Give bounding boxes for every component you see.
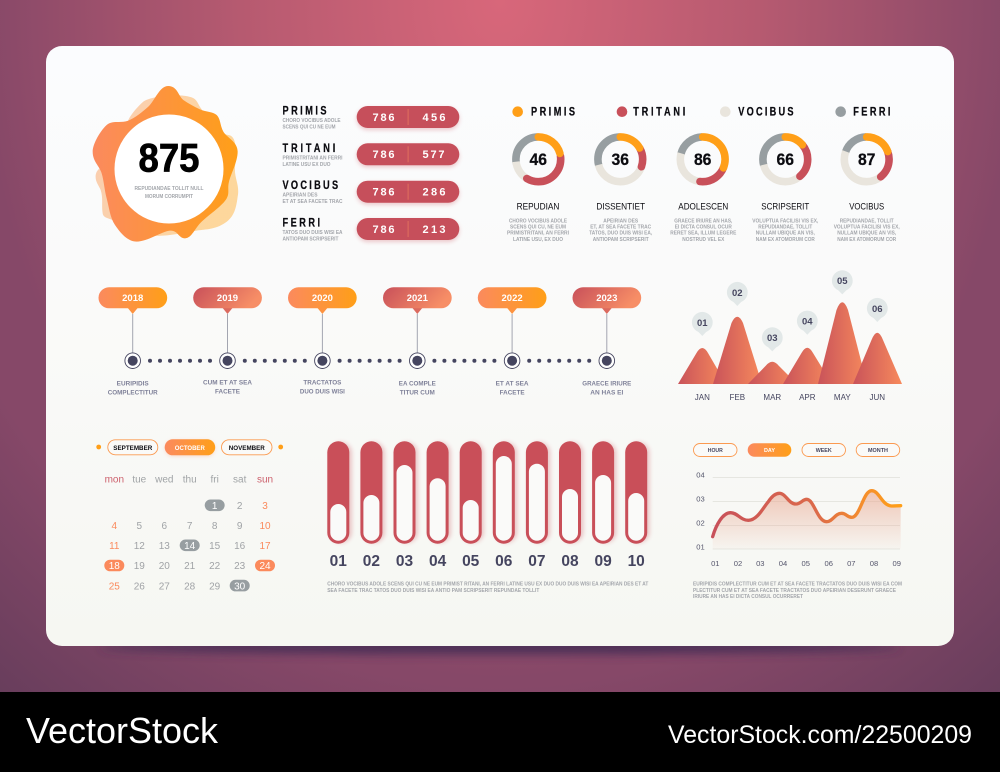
row: tritani: 786: [372, 149, 394, 161]
dates: 23: [234, 561, 246, 572]
milestone 2022: 2022: [502, 293, 523, 304]
milestone 2023: GRAECE IRIURE: [582, 380, 631, 388]
milestone 2021: 2021: [407, 293, 429, 304]
donut: vocibus: VOCIBUS: [849, 201, 884, 212]
pin labels: 06: [872, 304, 883, 315]
row: vocibus: VOCIBUS: [282, 180, 338, 192]
donut: vocibus: 87: [858, 151, 875, 169]
row: primis: 456: [422, 112, 446, 124]
month labels: JAN: [695, 393, 710, 402]
capsule numbers: 06: [495, 553, 513, 570]
weekdays: mon: [105, 475, 124, 486]
grid lines and axes: 06: [824, 559, 833, 568]
total caption: [134, 186, 204, 200]
donut: dissentiet: 36: [612, 151, 629, 169]
milestone 2022: FACETE: [500, 389, 525, 396]
donut: scripserit: NULLAM UBIQUE AN VIS,: [756, 231, 815, 237]
legend: TRITANI: [633, 107, 685, 119]
row: tritani: 577: [422, 149, 444, 161]
value pins: [692, 270, 888, 351]
donut: dissentiet: DISSENTIET: [596, 201, 645, 212]
legend: VOCIBUS: [738, 107, 794, 119]
month labels: APR: [799, 393, 816, 402]
row: primis: PRIMIS: [282, 106, 327, 118]
month selector: OCTOBER: [175, 445, 205, 452]
milestone 2019: CUM ET AT SEA: [203, 380, 252, 386]
weekdays: tue: [132, 475, 147, 486]
milestone 2018: 2018: [122, 293, 143, 304]
donut: dissentiet: TATOS, DUO DUIS WISI EA,: [589, 231, 653, 237]
month labels: MAY: [834, 393, 851, 402]
area and curve: [713, 491, 901, 549]
period selector: MONTH: [868, 448, 888, 454]
month labels: FEB: [730, 393, 745, 402]
dates: [109, 501, 271, 592]
milestone 2021: EA COMPLE: [399, 380, 436, 388]
dates: 16: [234, 541, 246, 552]
row: vocibus: 286: [422, 186, 446, 198]
row: ferri: 213: [422, 224, 446, 236]
footer bar: [0, 692, 1000, 772]
legend: PRIMIS: [531, 107, 575, 119]
dates: 17: [259, 541, 271, 552]
dates: 30: [234, 581, 246, 592]
mountain chart: [678, 270, 902, 402]
dates: 8: [212, 521, 218, 532]
month labels: [695, 393, 885, 402]
row: ferri: 786: [372, 224, 394, 236]
line chart caption: [693, 582, 902, 600]
dates: 11: [109, 541, 120, 552]
dates: 5: [137, 521, 143, 532]
row: ferri: ANTIOPAM SCRIPSERIT: [282, 236, 338, 242]
row: ferri: TATOS DUO DUIS WISI EA: [282, 230, 343, 236]
row: primis: [282, 106, 459, 130]
donut: vocibus: NAM EX ATOMORUM COR: [837, 237, 897, 243]
bar chart caption: SEA FACETE TRAC TATOS DUO DUIS WISI EA ANTIO PAM SCRIPSERIT REPUNDAE TOLLIT: [327, 588, 539, 594]
capsule numbers: 10: [628, 553, 645, 570]
grid lines and axes: 09: [892, 559, 901, 568]
pin labels: 04: [802, 316, 813, 328]
milestone 2023: AN HAS EI: [590, 389, 624, 396]
dates: 25: [109, 581, 120, 592]
month selector: [96, 439, 283, 456]
dates: 27: [159, 581, 170, 592]
row: tritani: TRITANI: [282, 143, 335, 155]
grid lines and axes: 08: [870, 559, 878, 568]
milestone 2019: FACETE: [215, 388, 240, 396]
milestone 2018: [98, 287, 167, 396]
dates: 29: [209, 581, 221, 592]
donut: scripserit: REPUDIANDAE, TOLLIT: [758, 225, 812, 231]
dates: 26: [134, 581, 145, 592]
capsule numbers: 01: [330, 553, 347, 570]
dates: 1: [212, 501, 218, 512]
dates: 28: [184, 581, 196, 592]
weekdays: wed: [154, 475, 173, 486]
card shadow: [100, 640, 900, 654]
timeline dots: [148, 359, 591, 363]
row: vocibus: [282, 180, 459, 205]
period selector: HOUR: [708, 448, 724, 454]
donut: dissentiet: ET, AT SEA FACETE TRAC: [590, 225, 652, 231]
donut: vocibus: REPUDIANDAE, TOLLIT: [840, 219, 894, 225]
milestone 2018: COMPLECTITUR: [108, 389, 158, 396]
row: vocibus: 786: [372, 186, 394, 198]
row: tritani: PRIMISTRITANI AN FERRI: [282, 155, 343, 161]
line chart caption: IRIURE AN HAS EI DICTA CONSUL OCURRERET: [693, 594, 803, 600]
dates: 3: [262, 501, 268, 512]
row: primis: SCENS QUI CU NE EUM: [282, 124, 336, 130]
grid lines and axes: 04: [779, 559, 787, 568]
period selector: [694, 443, 900, 457]
dates: 21: [184, 561, 196, 572]
donut: adolescen: RERET SEA, ILLUM LEGERE: [670, 231, 737, 237]
weekdays: [105, 475, 273, 486]
dates: 18: [109, 561, 120, 572]
blob stat: [93, 86, 238, 242]
dates: 7: [187, 521, 193, 532]
dates: 20: [159, 561, 170, 572]
donut: dissentiet: ANTIOPAM SCRIPSERIT: [593, 237, 649, 243]
dates: 13: [159, 541, 170, 552]
pin labels: [697, 276, 883, 344]
pin labels: 02: [732, 288, 743, 299]
timeline: [98, 287, 641, 396]
donut: repudian: CHORO VOCIBUS ADOLE: [509, 219, 568, 225]
dates: 15: [209, 541, 221, 552]
milestone 2020: TRACTATOS: [303, 380, 341, 386]
grid lines and axes: 05: [801, 559, 810, 568]
capsule numbers: 09: [594, 553, 612, 570]
row: primis: 786: [372, 112, 394, 124]
grid lines and axes: 07: [847, 559, 856, 568]
bar chart caption: [327, 582, 648, 594]
total value: 875: [138, 136, 200, 180]
dates: 4: [112, 521, 118, 532]
weekdays: sat: [233, 475, 247, 486]
period selector: WEEK: [816, 448, 832, 454]
center circle: [114, 114, 224, 224]
row: tritani: LATINE USU EX DUO: [282, 162, 331, 168]
image id: VectorStock.com/22500209: [668, 721, 972, 749]
dates: 12: [134, 541, 145, 552]
dates: 22: [209, 561, 221, 572]
donut: vocibus: [834, 137, 900, 243]
grid lines and axes: 02: [734, 559, 742, 568]
row: ferri: [282, 217, 459, 242]
row: ferri: FERRI: [282, 217, 320, 230]
dates: 10: [259, 521, 271, 532]
milestone 2020: [288, 287, 357, 396]
donut: adolescen: [670, 137, 737, 243]
milestone 2020: 2020: [312, 293, 333, 304]
month labels: JUN: [870, 393, 885, 402]
donut: adolescen: GRAECE IRIURE AN HAS,: [674, 219, 733, 225]
donut: vocibus: NULLAM UBIQUE AN VIS,: [837, 231, 897, 237]
blob background: [96, 95, 238, 236]
period selector: DAY: [764, 448, 775, 454]
date highlights: [104, 500, 275, 591]
milestone 2018: EURIPIDIS: [117, 380, 149, 388]
donut: adolescen: ADOLESCEN: [678, 201, 728, 212]
donut: repudian: PRIMISTRITANI, AN FERRI: [507, 231, 570, 237]
donut: adolescen: 86: [694, 151, 711, 169]
grid lines and axes: 03: [756, 559, 765, 568]
dates: 14: [184, 541, 196, 552]
row: vocibus: APEIRIAN DES: [282, 192, 318, 198]
donut: repudian: REPUDIAN: [517, 201, 559, 212]
donut: repudian: LATINE USU, EX DUO: [513, 237, 563, 243]
row: primis: CHORO VOCIBUS ADOLE: [282, 118, 341, 124]
line chart: [693, 443, 902, 600]
milestone 2020: DUO DUIS WISI: [300, 388, 345, 396]
blob foreground: [93, 86, 238, 242]
capsule bar chart: [327, 441, 650, 594]
panel: main card: [46, 46, 954, 646]
bar chart caption: CHORO VOCIBUS ADOLE SCENS QUI CU NE EUM PRIMIST RITANI, AN FERRI LATINE USU EX DUO DUO DUIS WISI EA APEIRIAN DES ET AT: [327, 582, 648, 588]
grid lines and axes: 01: [696, 542, 705, 552]
capsule shadows: [330, 442, 650, 543]
donut: repudian: [507, 137, 570, 243]
grid lines and axes: [696, 470, 901, 568]
milestone 2021: TITUR CUM: [400, 389, 435, 396]
milestone 2019: 2019: [217, 293, 238, 304]
line chart caption: PLECTITUR CUM ET AT SEA FACETE TRACTATOS DUO APEIRIAN DESERUNT GRAECE: [693, 588, 897, 594]
capsules: [327, 441, 647, 544]
grid lines and axes: 04: [696, 470, 705, 480]
donut: vocibus: VOLUPTUA FACILISI VIS EX,: [834, 225, 900, 231]
donut: adolescen: EI DICTA CONSUL OCUR: [675, 225, 732, 231]
capsule numbers: 04: [429, 553, 447, 570]
milestone 2021: [383, 287, 452, 396]
donut: adolescen: NOSTRUD VEL EX: [682, 237, 725, 243]
pin labels: 05: [837, 276, 848, 287]
donut: scripserit: SCRIPSERIT: [761, 201, 809, 212]
month labels: MAR: [763, 393, 781, 402]
donut: scripserit: NAM EX ATOMORUM COR: [756, 237, 815, 243]
line chart caption: EURIPIDIS COMPLECTITUR CUM ET AT SEA FACETE TRACTATOS DUO DUIS WISI EA COM: [693, 582, 902, 588]
row: vocibus: ET AT SEA FACETE TRAC: [282, 199, 343, 205]
month selector: NOVEMBER: [229, 445, 265, 452]
capsule values: [330, 456, 644, 541]
dates: 9: [237, 521, 243, 532]
donut: scripserit: 66: [777, 151, 794, 169]
pin labels: 03: [767, 333, 778, 344]
donut: repudian: SCENS QUI CU, NE EUM: [510, 225, 566, 231]
dates: 24: [259, 561, 271, 572]
dates: 6: [162, 521, 168, 532]
list: series values: [282, 106, 459, 242]
capsule numbers: [330, 553, 645, 570]
total caption: MORUM CORRUMPIT: [145, 194, 193, 200]
milestone 2022: ET AT SEA: [496, 380, 529, 388]
capsule numbers: 02: [363, 553, 380, 570]
milestone 2019: [193, 287, 262, 396]
month selector: SEPTEMBER: [113, 445, 153, 452]
mountains: [678, 302, 902, 384]
capsule numbers: 08: [561, 553, 579, 570]
weekdays: thu: [183, 475, 197, 486]
weekdays: sun: [257, 475, 273, 486]
dates: 19: [134, 561, 145, 572]
donut: scripserit: [752, 137, 819, 243]
milestone 2023: [572, 287, 641, 396]
legend: [512, 106, 891, 119]
milestone 2022: [478, 287, 546, 396]
donut: scripserit: VOLUPTUA FACILISI VIS EX,: [752, 219, 819, 225]
milestone 2023: 2023: [596, 293, 617, 304]
grid lines and axes: 02: [696, 518, 705, 528]
capsule numbers: 07: [528, 553, 546, 570]
grid lines and axes: 03: [696, 494, 705, 504]
calendar: [96, 439, 283, 592]
grid lines and axes: 01: [711, 559, 720, 568]
legend: FERRI: [853, 107, 891, 119]
brand: VectorStock: [26, 710, 219, 751]
dates: 2: [237, 501, 243, 512]
pin labels: 01: [697, 318, 708, 329]
capsule numbers: 05: [462, 553, 480, 570]
row: tritani: [282, 143, 459, 168]
capsule numbers: 03: [396, 553, 413, 570]
total caption: REPUDIANDAE TOLLIT NULL: [134, 186, 204, 192]
weekdays: fri: [211, 475, 219, 486]
donut: dissentiet: APEIRIAN DES: [603, 219, 639, 225]
donut: repudian: 46: [530, 151, 547, 169]
donut: dissentiet: [589, 137, 653, 243]
